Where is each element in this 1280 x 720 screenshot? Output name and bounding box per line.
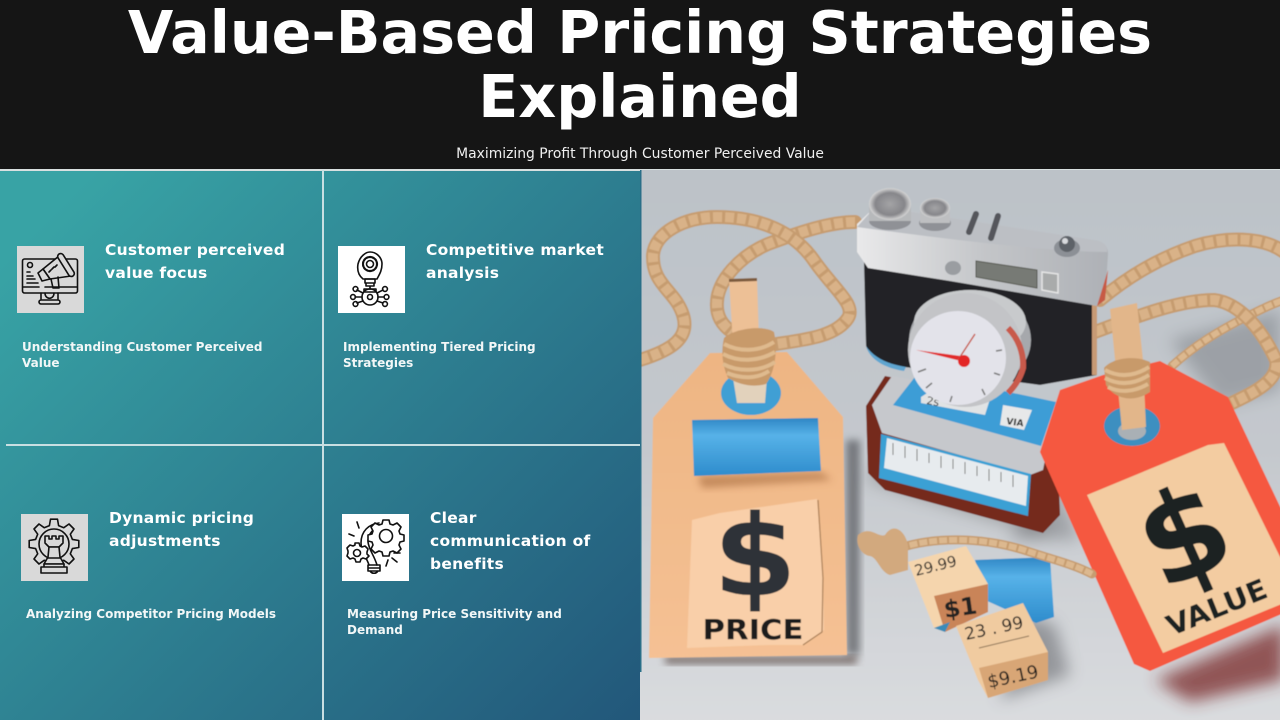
heading: Competitive market — [426, 241, 604, 259]
clothespin — [729, 278, 759, 345]
price block 23.99: 23 . 99 — [963, 613, 1025, 645]
description: Analyzing Competitor Pricing Models — [26, 607, 276, 621]
icon: bulb with gears — [342, 514, 409, 581]
price block 29.99: $1 — [942, 592, 979, 624]
tag eyelet — [721, 371, 781, 415]
description — [22, 340, 262, 370]
subtitle: Maximizing Profit Through Customer Perceived Value — [456, 146, 824, 162]
scale window — [879, 434, 1031, 516]
card: customer perceived value — [17, 241, 285, 370]
rope: right loops — [1095, 240, 1280, 403]
description: Demand — [347, 623, 403, 637]
photo background — [636, 166, 1280, 720]
clip shadow — [698, 472, 832, 488]
description — [347, 607, 562, 637]
device: red scale — [866, 373, 1060, 533]
icon: monitor with megaphone — [17, 246, 84, 313]
VALUE label: VALUE — [1161, 572, 1272, 643]
description: Implementing Tiered Pricing — [343, 340, 536, 354]
dollar sign: $ — [1115, 453, 1253, 619]
torn paper — [687, 499, 824, 648]
blue clip — [692, 418, 821, 476]
heading: analysis — [426, 264, 499, 282]
heading: communication of — [430, 532, 591, 550]
heading: value focus — [105, 264, 208, 282]
camera dials — [869, 212, 911, 230]
description: Value — [22, 356, 60, 370]
camera — [857, 188, 1108, 385]
heading — [109, 509, 254, 550]
card: dynamic pricing — [21, 509, 276, 621]
device: red scale: 2s — [925, 394, 941, 409]
rope: lower knot — [857, 528, 1092, 575]
torn paper — [1087, 443, 1280, 653]
heading: Dynamic pricing — [109, 509, 254, 527]
rope knot — [1104, 358, 1150, 398]
description: Understanding Customer Perceived — [22, 340, 262, 354]
description — [343, 340, 536, 370]
heading — [105, 241, 285, 282]
card: clear communication — [342, 509, 591, 637]
icon: chess rook in gear — [21, 514, 88, 581]
blue control panel — [893, 373, 1056, 446]
soft shadows — [665, 310, 1280, 702]
description: Measuring Price Sensitivity and — [347, 607, 562, 621]
icon: lightbulb with network — [338, 246, 405, 313]
tag eyelet — [1104, 406, 1160, 446]
camera top silver — [857, 206, 1108, 306]
heading: Customer perceived — [105, 241, 285, 259]
camera display window — [976, 261, 1037, 288]
header band — [0, 0, 1280, 169]
heading: Clear — [430, 509, 477, 527]
panel: gradient strategy grid — [0, 170, 641, 720]
rope knot — [722, 328, 776, 386]
description: Strategies — [343, 356, 413, 370]
rope: left loops — [640, 217, 855, 360]
illustration: price and value tags with camera — [640, 170, 1280, 720]
title: Explained — [478, 63, 802, 131]
edge strip — [640, 170, 642, 672]
title — [128, 0, 1152, 131]
blue cylinder — [975, 557, 1054, 623]
price block 23.99: $9.19 — [986, 662, 1040, 693]
dollar sign: $ — [713, 492, 797, 622]
device: red scale: VIA — [1006, 417, 1024, 429]
camera body black — [864, 262, 1097, 385]
price tag — [649, 278, 847, 658]
heading: adjustments — [109, 532, 221, 550]
value tag — [1040, 303, 1280, 671]
heading — [426, 241, 604, 282]
price block 29.99: 29.99 — [913, 552, 959, 580]
camera knob and pins — [1054, 239, 1080, 257]
gauge dial — [908, 290, 1031, 407]
price block 23.99 — [956, 603, 1048, 698]
clothespin — [1110, 303, 1146, 430]
heading — [430, 509, 591, 573]
card: competitive market analysis — [338, 241, 604, 370]
heading: benefits — [430, 555, 504, 573]
PRICE label: PRICE — [702, 613, 804, 646]
title: Value-Based Pricing Strategies — [128, 0, 1152, 67]
price block 29.99 — [908, 546, 988, 632]
